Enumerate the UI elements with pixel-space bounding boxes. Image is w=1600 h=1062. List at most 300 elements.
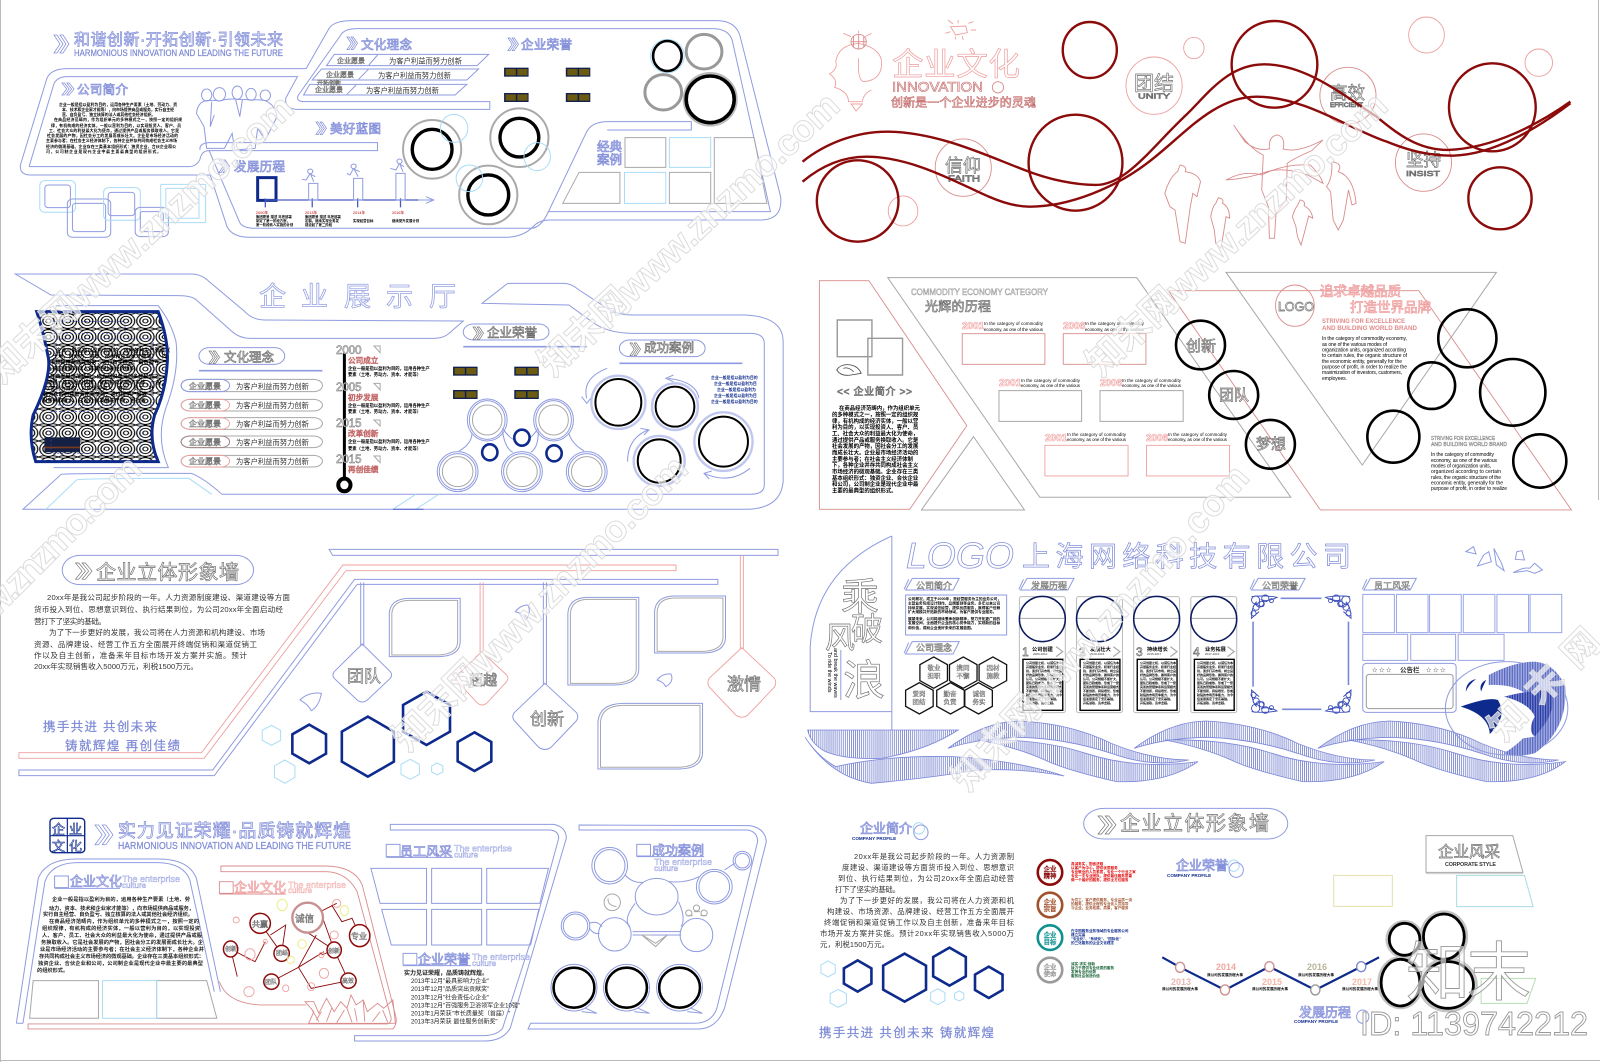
development columns: 验，逐步打开市场，树立良 <box>1083 668 1119 673</box>
panel: strength proves honor <box>16 818 766 1041</box>
development columns: 公司创建 <box>1032 645 1054 653</box>
development columns: 3 <box>1136 645 1143 659</box>
development columns: 团队日趋成熟，形成了一套 <box>1026 680 1062 685</box>
honors list: 2013年12月"最具影响力企业" <box>411 977 489 985</box>
success cases <box>551 843 752 1013</box>
spirit values with rings: "专业化"、"系统化"、"国际化" <box>1071 936 1121 941</box>
timeline: company milestones: 公司成立 <box>348 355 379 365</box>
left intro text: 市场经济的微观基础。企业存在三类 <box>832 468 919 476</box>
development columns: 2000-2010 <box>1033 652 1048 656</box>
culture concept list: 为客户利益而努力创新 <box>236 420 309 428</box>
timeline: company milestones: 要素（土地、劳动力、资本、才能等） <box>348 408 421 415</box>
black rings with values: 梦想 <box>1256 436 1286 453</box>
text: company profile: 社会发展的产物，因社会分工的发展而成长壮大。企业是市场经济活动的 <box>47 133 178 138</box>
philosophy hexagons: 因材 <box>986 663 1000 672</box>
red wave ribbons and rings <box>803 21 1570 242</box>
company profile heading <box>852 821 928 841</box>
philosophy hexagons: 携同 <box>956 663 970 672</box>
left intro text: 主要的最典型的组织形式。 <box>832 486 897 494</box>
culture concept rows: 企业愿景 <box>337 56 365 65</box>
success case group: 企业一般是指以盈利为目的 <box>711 375 758 380</box>
timeline: company milestones: 2005 <box>336 382 362 394</box>
spirit values with rings: 企业 <box>1044 897 1057 906</box>
english paragraph one <box>1322 336 1408 382</box>
text: company profile: 企业一般是指以盈利为目的，运用各种生产要素（土地、劳动力、资 <box>59 102 177 107</box>
watermark: brand mark and id: ID: 1139742212 <box>1360 1005 1588 1042</box>
text: company profile: 律，有机构成的经济实体，一般以营利为目的，以实现投资人、客户、员 <box>51 123 181 128</box>
panel: harmonious innovation wall <box>20 21 781 237</box>
success case group: 企业一般是指以盈利为目的 <box>711 399 758 404</box>
timeline: development history: 继续提升发展计划 <box>392 218 420 223</box>
angled rails <box>19 549 778 776</box>
timeline: 2013 to 2017: 2013 <box>1171 977 1191 987</box>
english paragraph one: organization units, organized according <box>1322 348 1406 354</box>
network: culture keywords: 诚信 <box>295 913 314 925</box>
company intro box: 持续发展，实现诚信经营，提供优质服务，赢得客户信赖 <box>908 605 1000 610</box>
development columns: 后发展奠定了坚实基础。 <box>1140 696 1173 701</box>
development columns: 团队日趋成熟，形成了一套 <box>1140 680 1176 685</box>
timeline: development history: 定稿，继续实现业务发 <box>305 218 340 223</box>
company intro box: 和价值，成就企业美好未来的发展蓝图。 <box>908 625 974 630</box>
text: company profile <box>46 102 182 154</box>
spirit values with rings: 致力于提供专业优质的服务 <box>1071 965 1115 970</box>
culture heading in red: culture <box>288 886 313 895</box>
profile paragraph: 20xx年是我公司起步阶段的一年。人力资源制 <box>854 852 1014 861</box>
culture concept list: 企业愿景 <box>189 437 221 447</box>
photo frames with rounded corners <box>389 596 726 769</box>
development columns: 团队日趋成熟，形成了一套 <box>1197 680 1233 685</box>
milestone boxes: economy, as one of the various <box>1168 437 1228 442</box>
heading: pursue excellent quality: 追求卓越品质 <box>1320 284 1401 299</box>
value labels: 信仰 <box>945 156 981 176</box>
notice board: ☆ ☆ ☆ <box>1372 666 1392 674</box>
timeline: 2013 to 2017: 2014 <box>1216 962 1236 972</box>
sail with motto: 浪 <box>843 657 885 704</box>
culture heading in red: The enterprise <box>288 880 346 890</box>
left intro text: 下，各种企业并存共同构成社会主义 <box>832 461 919 469</box>
timeline: company milestones: 要素（土地、劳动力、资本、才能等） <box>348 371 421 378</box>
timeline: 2013 to 2017: 2015 <box>1262 977 1282 987</box>
culture concept list: 企业愿景 <box>189 418 221 428</box>
paragraph: 营打下了坚实的基础。 <box>34 616 106 626</box>
heading: enterprise culture: INNOVATION <box>892 80 983 94</box>
culture paragraph: 务换取收入。它是社会发展的产物，因社会分工的发展而成长壮大。企 <box>41 938 204 946</box>
staff photo grid <box>1363 594 1562 660</box>
development columns: 2010-2015 <box>1090 652 1105 656</box>
english paragraph two: economy, as one of the various <box>1431 458 1498 464</box>
enterprise honor pill and plaques: 企业荣誉 <box>487 325 538 340</box>
sail with motto: 破 <box>851 611 883 647</box>
panel: enterprise showroom <box>15 274 783 509</box>
spirit values with rings: 在中国服务业务领域的专业服务公司 <box>1071 928 1129 933</box>
development columns: 好的品牌形象，赢得客户的 <box>1197 672 1233 677</box>
english paragraph one: employees. <box>1322 376 1347 382</box>
success cases: culture <box>654 864 679 873</box>
slogans: 铸就辉煌 再创佳绩 <box>65 738 180 753</box>
development columns: 开展服务业务，积累行业经 <box>1197 664 1233 669</box>
development columns: 开展服务业务，积累行业经 <box>1026 664 1062 669</box>
spirit values with rings: 做一个最好的服务，提供全方位服务 <box>1071 877 1129 882</box>
philosophy hexagons: 敬业 <box>928 663 941 672</box>
milestone boxes: economy, as one of the various <box>1021 383 1081 388</box>
honors list <box>403 952 530 1026</box>
section headings: 文化理念 <box>361 37 412 52</box>
left intro text: 基本组织形式：独资企业、合伙企业 <box>832 474 919 482</box>
text: company profile: 工、社会大众的利益最大化为使命，通过提供产品或服务换取收入。它是 <box>49 128 179 133</box>
development columns: 较强的市场竞争能力，为今 <box>1140 692 1176 697</box>
heading: harmonious innovation: HARMONIOUS INNOVATION AND LEADING THE FUTURE <box>74 48 283 58</box>
timeline: 2013 to 2017: 我公司的发展历程大事 <box>1252 986 1288 991</box>
development columns: 公司创建之初，以诚信为本 <box>1083 660 1119 665</box>
culture concept list: 为客户利益而努力创新 <box>236 382 309 391</box>
culture concept list: 文化理念 <box>224 350 275 364</box>
honors list: 2013年12月"社会责任心企业" <box>411 994 489 1002</box>
network: culture keywords: 专业 <box>351 931 367 941</box>
banner text: 独立核算的法人或其他社会经济组织。 <box>52 364 140 372</box>
value labels: INSIST <box>1406 169 1441 178</box>
spirit values with rings: 宗旨 <box>1044 904 1056 913</box>
left intro text: 工、社会大众的利益最大化为使命， <box>832 430 918 438</box>
success case group <box>582 340 758 486</box>
spirit values with rings: 的三化服务的企业文化理念 <box>1071 940 1115 945</box>
success case group: 企业一般是指以盈利为目 <box>714 381 757 386</box>
culture paragraph: 独资企业、合伙企业和公司，公司制企业是现代企业中最主要的最典型 <box>38 959 203 967</box>
development columns: 验，逐步打开市场，树立良 <box>1026 668 1062 673</box>
development heading: 发展历程 <box>1299 1005 1351 1020</box>
culture paragraph: 在商品经济范畴内，作为组织单元的多种模式之一，按照一定的 <box>49 917 199 925</box>
sail with motto: To ride the winds <box>826 652 832 693</box>
development columns: 4 <box>1193 645 1200 659</box>
corporate style frame: 企业风采 <box>1438 843 1500 861</box>
spirit values with rings: 服务社会创造价值 <box>1071 973 1100 978</box>
section labels: 公司荣誉 <box>1262 580 1298 591</box>
profile paragraph: 到位、执行结果到位，为公司20xx年全面启动经营 <box>838 874 1014 883</box>
development columns: 好的品牌形象，赢得客户的 <box>1083 672 1119 677</box>
development columns: 完善的管理体系和运营模式 <box>1197 684 1233 689</box>
patterned wave banner <box>31 312 167 462</box>
heading: logo and company name <box>906 535 1351 576</box>
spirit values with rings: 与企业，业务拓展，质量，客户服务 <box>1071 905 1129 910</box>
ornamental honor frame <box>1251 595 1351 713</box>
development columns: 团队日趋成熟，形成了一套 <box>1083 680 1119 685</box>
watermarks: site address: 知末网www.znzmo.com <box>943 457 1257 798</box>
logo block: 化 <box>69 839 82 854</box>
culture concept list: 企业愿景 <box>189 456 221 466</box>
network: culture keywords: 共赢 <box>252 919 268 929</box>
culture paragraph: 动力、资本、技术和企业家才能等），向市场提供商品或服务， <box>49 904 194 912</box>
honors list: 2013年12月"百强服务卫浴领军企业10强" <box>411 1002 520 1010</box>
spirit values with rings: 专业敬业的人员素质，专业一个行业之家 <box>1071 869 1136 874</box>
panel: three-dimensional image wall <box>19 549 778 783</box>
timeline: 2013 to 2017: 2016 <box>1307 962 1327 972</box>
spirit values with rings: 精神 <box>1044 871 1056 880</box>
english paragraph two: rules, the organic structure of the <box>1431 475 1501 481</box>
development columns: 不断创新，持续增长，形成 <box>1140 688 1176 693</box>
culture concept list: 为客户利益而努力创新 <box>236 457 309 466</box>
profile paragraph: 元，利税1500万元。 <box>820 940 889 949</box>
success case group: 企业一般是指以盈利为目 <box>714 393 757 398</box>
timeline: company milestones: 2015 <box>336 418 362 430</box>
text: company profile: 营、自负盈亏、独立核算的法人或其他社会经济组织。 <box>62 112 155 117</box>
value labels: FAITH <box>948 174 980 184</box>
honors list: 2013年3月荣获 最佳服务创新奖" <box>411 1018 497 1026</box>
corporate culture heading <box>55 874 180 890</box>
banner text: 以营利为目的，以实现投资人、客户、员工、社 <box>45 384 155 392</box>
timeline: 2013 to 2017: 我公司的发展历程大事 <box>1342 986 1378 991</box>
timeline: development history: 第一阶段转入实施的计划 <box>256 222 294 227</box>
spirit values with rings: 为员工、客户提供服务，专业品质一流 <box>1071 897 1132 902</box>
timeline: development history: 建设起了第二阶段 <box>305 222 333 227</box>
development columns: 开展服务业务，积累行业经 <box>1140 664 1176 669</box>
spirit values with rings: 发挥专业的优势 <box>1071 969 1097 974</box>
development columns: 好的品牌形象，赢得客户的 <box>1026 672 1062 677</box>
company intro box: 展望未来，公司将继续秉承创新精神，努力开拓更广阔的 <box>908 616 1000 621</box>
corporate culture heading: culture <box>122 881 147 890</box>
development columns: 较强的市场竞争能力，为今 <box>1083 692 1119 697</box>
black rings with values: 创新 <box>1186 338 1216 355</box>
left intro text: << 企业简介 >> <box>837 385 912 398</box>
philosophy hexagons: 负责 <box>944 697 957 706</box>
development columns: 开拓进取，追求卓越。 <box>1140 700 1170 705</box>
staff style heading and frames: culture <box>454 850 479 860</box>
timeline: development history: 实现经营目标 <box>353 218 374 223</box>
milestone boxes: 2006 <box>1100 378 1123 389</box>
profile paragraph: 构建设、市场资源、品牌建设、经营工作五方全面展开 <box>827 907 1014 916</box>
left intro text: 的多种模式之一，按照一定的组织规 <box>832 410 919 418</box>
timeline: development history: 2016年 <box>392 210 404 215</box>
heading: glorious history: COMMODITY ECONOMY CATEGORY <box>911 287 1048 297</box>
timeline: development history: 2013年 <box>305 210 317 215</box>
network: culture keywords: 创新 <box>328 947 340 955</box>
milestone boxes: economy, as one of the various <box>1085 327 1145 332</box>
value labels <box>945 72 1441 184</box>
section labels: 员工风采 <box>1374 581 1410 591</box>
heading: enterprise showroom: 企业展示厅 <box>259 282 456 312</box>
philosophy hexagons: 诚信 <box>972 689 986 698</box>
milestone boxes: 2001 <box>1045 433 1068 444</box>
colored photo frames <box>1334 875 1536 1003</box>
left intro text: 律，有机构成的经济实体，一般以营 <box>832 417 919 425</box>
heading: pursue excellent quality: 打造世界品牌 <box>1350 299 1431 315</box>
development columns: 开拓进取，追求卓越。 <box>1197 700 1227 705</box>
paragraph: 为了下一步更好的发展，我公司将在人力资源和机构建设、市场 <box>49 627 265 637</box>
development heading <box>1294 1005 1369 1024</box>
heading: harmonious innovation: 和谐创新·开拓创新·引领未来 <box>74 31 283 49</box>
development columns: 开展服务业务，积累行业经 <box>1083 664 1119 669</box>
development columns: 后发展奠定了坚实基础。 <box>1026 696 1059 701</box>
heading: pursue excellent quality <box>1320 284 1431 332</box>
timeline: company milestones: 要素（土地、劳动力、资本、才能等） <box>348 445 421 452</box>
profile paragraph: 为了下一步更好的发展，我公司将在人力资源和机 <box>840 896 1015 905</box>
milestone boxes: In the category of commodity <box>1168 432 1228 437</box>
culture paragraph: 人、客户、员工、社会大众的利益最大化为使命，通过提供产品或服 <box>42 931 203 939</box>
hanging value tags: 创新 <box>530 710 564 729</box>
honors list: 2013年1月荣获"市长质量奖（首届）" <box>411 1010 510 1018</box>
heading: logo and company name: LOGO <box>906 535 1014 576</box>
heading: strength: HARMONIOUS INNOVATION AND LEADING THE FUTURE <box>118 840 351 852</box>
development columns: 认可。公司规模不断扩大， <box>1140 676 1176 681</box>
sail with motto: and break the waves <box>832 648 838 698</box>
company profile heading: 企业简介 <box>860 821 912 836</box>
culture concept rows: 为客户利益而努力创新 <box>366 86 439 95</box>
culture concept rows: 企业愿景 <box>326 70 354 79</box>
honor node cluster <box>437 399 607 492</box>
timeline: company milestones <box>336 345 430 491</box>
culture concept rows <box>304 54 489 95</box>
paragraph: 20xx年实现销售收入5000万元，利税1500万元。 <box>34 661 198 671</box>
sail with motto <box>810 536 892 740</box>
left intro text: 在商品经济范畴内，作为组织单元 <box>839 404 920 412</box>
corporate style frame: CORPORATE STYLE <box>1445 862 1496 868</box>
development columns: 验，逐步打开市场，树立良 <box>1197 668 1233 673</box>
english paragraph two: organized according to certain <box>1431 469 1501 475</box>
silhouette: team of people <box>196 86 277 150</box>
honor heading: 企业荣誉 <box>1176 858 1228 873</box>
heading: harmonious innovation <box>54 31 283 58</box>
development columns: 完善的管理体系和运营模式 <box>1140 684 1176 689</box>
development columns: 完善的管理体系和运营模式 <box>1026 684 1062 689</box>
banner text: 企业一般是指以盈利为目的，运用各种生产要素（ <box>56 346 170 354</box>
corporate culture heading: The enterprise <box>122 874 180 884</box>
development columns: 完善的管理体系和运营模式 <box>1083 684 1119 689</box>
notice board: ☆ ☆ ☆ <box>1426 666 1446 674</box>
milestone boxes <box>962 321 1230 476</box>
development columns: 不断创新，持续增长，形成 <box>1083 688 1119 693</box>
culture paragraph <box>37 895 204 974</box>
english paragraph one: purpose of profit, in order to realize the <box>1322 364 1407 370</box>
heading: strength: 实力见证荣耀·品质铸就辉煌 <box>118 821 351 841</box>
paragraph: 资源、品牌建设、经营工作五方全面展开终端促销和渠道促销工 <box>34 639 257 649</box>
hanging value tags <box>333 555 776 749</box>
section headings: 经典 <box>597 140 622 154</box>
honors list: 2013年12月"品质突出贡献奖" <box>411 985 489 993</box>
left intro text: 利为目的，以实现投资人、客户、员 <box>832 423 919 431</box>
english paragraph one: as one of the various modes of <box>1322 342 1388 348</box>
showroom frame outlines <box>15 274 783 509</box>
english paragraph one: maximization of investors, customers, <box>1322 370 1402 376</box>
left intro text <box>832 385 920 494</box>
success cases: 成功案例 <box>652 843 704 858</box>
slogans <box>43 719 180 753</box>
success case group: 成功案例 <box>644 340 694 355</box>
heading: logo and company name: 上海网络科技有限公司 <box>1022 541 1351 572</box>
decorative photo frames left <box>40 181 206 237</box>
paragraph: 货币投入到位、思想意识到位、执行结果到位，为公司20xx年全面启动经 <box>34 604 283 614</box>
value labels: 团结 <box>1134 72 1174 95</box>
culture concept rows: 为客户利益而努力创新 <box>389 56 462 66</box>
english paragraph one: the economic entity, generally for the <box>1322 359 1402 365</box>
section labels: 公司简介 <box>916 580 952 591</box>
milestone boxes: In the category of commodity <box>984 321 1044 326</box>
culture concept rows: 开拓创新 <box>317 79 341 87</box>
milestone boxes: 2006 <box>1146 433 1169 444</box>
left intro text: 而成长壮大。企业是市场经济活动的 <box>832 448 919 456</box>
heading: strength <box>95 821 351 852</box>
slogan: 携手共进 共创未来 铸就辉煌 <box>819 1025 994 1040</box>
heading pill <box>62 555 254 585</box>
timeline: 2013 to 2017: 2017 <box>1352 977 1372 987</box>
banner text: 土地、劳动力、资本、技术和企业家才能等），向 <box>53 352 167 360</box>
timeline: company milestones: 改革创新 <box>348 428 379 438</box>
milestone boxes: economy, as one of the various <box>984 327 1044 332</box>
spirit values with rings: 企业 <box>1044 930 1057 939</box>
company intro box: 扩大规模并开拓新的市场领域，为客户提供专业服务。 <box>908 609 996 614</box>
logo block: 文 <box>52 839 65 854</box>
timeline: company milestones: 2000 <box>336 345 362 357</box>
culture paragraph: 存共同构成社会主义市场经济的微观基础。企业存在三类基本组织形式： <box>39 952 204 960</box>
watermarks: site address <box>0 84 1600 798</box>
english paragraph two: purpose of profit, in order to realize <box>1431 486 1507 492</box>
timeline: development history: 集团愿景 描述 年度部署 <box>305 214 341 219</box>
english paragraph two: In the category of commodity <box>1431 452 1494 458</box>
spirit values with rings: 目标 <box>1044 937 1057 946</box>
network: culture keywords: 创新 <box>225 945 237 953</box>
text: company profile: 在商品经济范畴内，作为组织单元的多种模式之一，按照一定的组织规 <box>54 117 182 122</box>
english paragraph two: STRIVING FOR EXCELLENCE <box>1431 436 1495 442</box>
timeline: 2013 to 2017 <box>1162 957 1379 995</box>
timeline: development history: 制定了第一阶段方案， <box>256 218 290 223</box>
section headings: 美好蓝图 <box>330 122 381 136</box>
timeline: company milestones: 企业一般是指以盈利为目的，运用各种生产 <box>348 402 430 409</box>
company profile heading: COMPANY PROFILE <box>852 836 896 841</box>
section headings: 案例 <box>597 152 622 167</box>
ring cluster <box>1379 912 1477 1011</box>
value labels: 高效 <box>1330 83 1365 103</box>
culture paragraph: 的组织形式。 <box>37 966 68 974</box>
hexagon cluster <box>821 948 1003 1007</box>
culture heading in red: 企业文化 <box>234 880 286 895</box>
culture photo frames <box>30 981 217 1018</box>
heading: pursue excellent quality: AND BUILDING WORLD BRAND <box>1322 325 1417 332</box>
spirit values with rings: 建立完善 <box>1071 932 1086 937</box>
spirit values with rings: 使命 <box>1044 969 1057 978</box>
slogans: 携手共进 共创未来 <box>43 719 157 734</box>
spirit values with rings: 真诚务实，勤奋进取 <box>1071 861 1104 866</box>
culture concept list: 企业愿景 <box>189 400 221 410</box>
development columns: 公司创建之初，以诚信为本 <box>1197 660 1233 665</box>
banner text: 市场提供商品或服务，实行自主经营、自负盈亏 <box>50 358 159 366</box>
philosophy hexagons: 团结 <box>912 697 926 706</box>
section labels: 公司理念 <box>916 642 952 653</box>
banner text: 按照一定的组织规律，有机构成的经济实体，一般 <box>47 378 162 386</box>
left intro text: 社会发展的产物，因社会分工的发展 <box>832 442 919 450</box>
development columns: 较强的市场竞争能力，为今 <box>1197 692 1233 697</box>
enterprise honor pill and plaques <box>453 324 587 399</box>
development columns: 后发展奠定了坚实基础。 <box>1083 696 1116 701</box>
section headings: 发展历程 <box>234 159 285 174</box>
network: culture keywords <box>223 899 370 997</box>
timeline: company milestones: 企业一般是指以盈利为目的，运用各种生产 <box>348 365 430 372</box>
milestone boxes: In the category of commodity <box>1021 378 1081 383</box>
panel: commodity economy wall <box>819 272 1571 510</box>
staff style heading and frames: 员工风采 <box>400 844 452 859</box>
watermarks: site address: 知末网www.znzmo.com <box>530 84 847 384</box>
philosophy hexagons: 施教 <box>986 671 1000 680</box>
value labels: 坚持 <box>1406 150 1441 170</box>
panel outlines <box>16 824 766 1041</box>
timeline: development history: 集团愿景 描述 年度部署 <box>256 214 292 219</box>
development columns <box>1019 596 1237 713</box>
corporate culture heading: 企业文化 <box>70 874 122 889</box>
notice board <box>1363 663 1456 712</box>
section headings: 公司简介 <box>77 83 128 97</box>
english paragraph one: to certain rules, the organic structure of <box>1322 353 1408 359</box>
honors list: culture <box>472 959 497 968</box>
watermarks: site address: 知末网www.znzmo.com <box>385 448 696 759</box>
hanging value tags: 超越 <box>469 672 497 688</box>
banner text <box>42 346 170 404</box>
development columns: 发展壮大 <box>1090 645 1112 653</box>
